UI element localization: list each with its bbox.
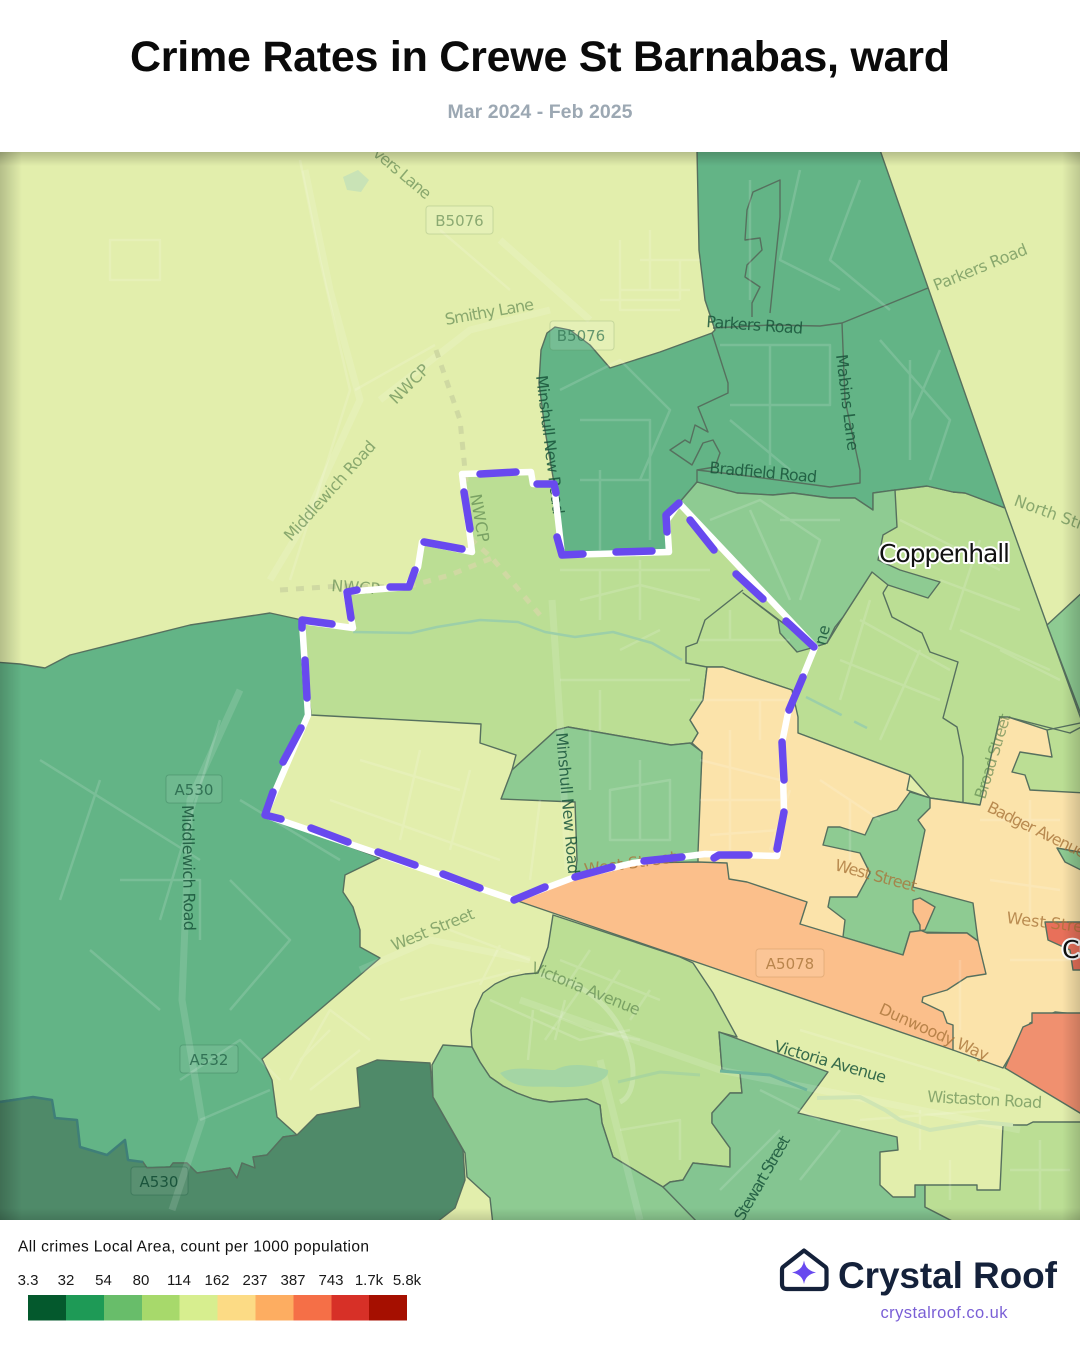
area: sliver mid green [743,593,815,652]
road shield: A532: A532 [190,1051,228,1069]
area: small green east [1057,848,1080,872]
road labels: Parkers Road [706,312,804,338]
area: south-west dark green [0,1060,465,1225]
road shield: A530 south [131,1167,188,1195]
road labels: Middlewich Road [280,437,380,545]
legend values: 237 [242,1272,268,1289]
legend title: All crimes Local Area, count per 1000 population [18,1238,369,1256]
road labels: Bradfield Road [709,458,818,486]
road labels: West Street [833,856,919,896]
legend values: 114 [167,1272,191,1289]
road labels: Victoria Avenue [772,1037,889,1087]
legend values: 5.8k [393,1272,422,1289]
internal boundaries [670,180,1080,803]
legend colour scale [28,1295,407,1320]
river along south-west boundary [0,1097,143,1162]
ward boundary [265,472,815,900]
area: south-east light green [925,1122,1080,1225]
streets [40,160,1070,1210]
road labels: Minshull New Road [552,732,583,875]
legend values: 387 [280,1272,306,1289]
title: Crime Rates in Crewe St Barnabas, ward [130,33,950,81]
road shield: A530 south: A530 [140,1173,178,1191]
area: left green [0,613,380,1178]
road labels: ne [811,623,834,647]
brand name: Crystal Roof [838,1255,1058,1296]
website: crystalroof.co.uk [880,1304,1008,1322]
area: Queens Park light green [471,915,742,1187]
area: Stewart Street green [663,1032,960,1225]
legend values: 54 [95,1272,112,1289]
road labels: Middlewich Road [178,805,199,931]
legend values: 1.7k [355,1272,384,1289]
road shield: A5078 [756,949,824,977]
icon: house with star [782,1250,826,1289]
road shield: B5076 south [550,321,614,350]
area: central-north light green [302,472,1080,805]
lake [500,1065,608,1087]
road labels: NWCP [466,492,493,544]
area: red east [1045,922,1080,970]
road shield: A530 north: A530 [175,781,213,799]
road labels: Parkers Road [930,240,1030,295]
logo [782,1250,1058,1322]
park inner paths [490,1000,630,1060]
legend values: 80 [133,1272,149,1289]
legend values [18,1272,422,1289]
legend [18,1238,422,1320]
area: Coppenhall mid green [679,482,940,647]
pond [343,170,369,192]
area: red-orange south-east [1005,1013,1080,1116]
road shield: A530 north [166,775,222,803]
road shield: B5076 south: B5076 [557,327,605,345]
road shield: B5076 north: B5076 [435,212,484,230]
road labels: Minshull New Road [532,374,568,515]
road labels: Victoria Avenue [529,958,643,1019]
area: peach east [690,667,1080,1068]
road labels: Dunwoody Way [876,999,992,1065]
legend values: 32 [58,1272,74,1289]
area: north green [539,150,1005,555]
area: station orange [515,862,986,1050]
legend values: 162 [204,1272,230,1289]
road labels: Wistaston Road [927,1087,1043,1112]
NWCP canal path [280,350,540,615]
place label: Coppenhall: Coppenhall [879,539,1010,568]
area: south mid green [432,1045,705,1225]
road shield: B5076 north [426,206,493,234]
road labels: NWCP [385,360,433,408]
road labels: Smithy Lane [443,295,535,329]
road shield: A5078: A5078 [766,955,814,973]
legend values: 3.3 [18,1272,38,1289]
area: central mid green [501,727,702,878]
road labels [178,144,1080,1224]
date subtitle: Mar 2024 - Feb 2025 [448,101,633,123]
road labels: West Street [583,847,678,879]
road labels: Stewart Street [730,1132,794,1224]
road labels: Broad Street [971,711,1015,801]
road labels: Mabins Lane [832,353,863,452]
road labels: vers Lane [369,144,435,203]
stream [353,620,1013,1130]
area: West Street mid green [823,792,978,955]
map edge vignette [0,152,1080,1220]
road labels: West Street [388,904,477,955]
area: east mid green [1047,590,1080,725]
park ring road [540,975,633,1102]
legend values: 743 [318,1272,344,1289]
road labels: NWCP [331,576,381,598]
road shield: A532 [180,1045,238,1073]
